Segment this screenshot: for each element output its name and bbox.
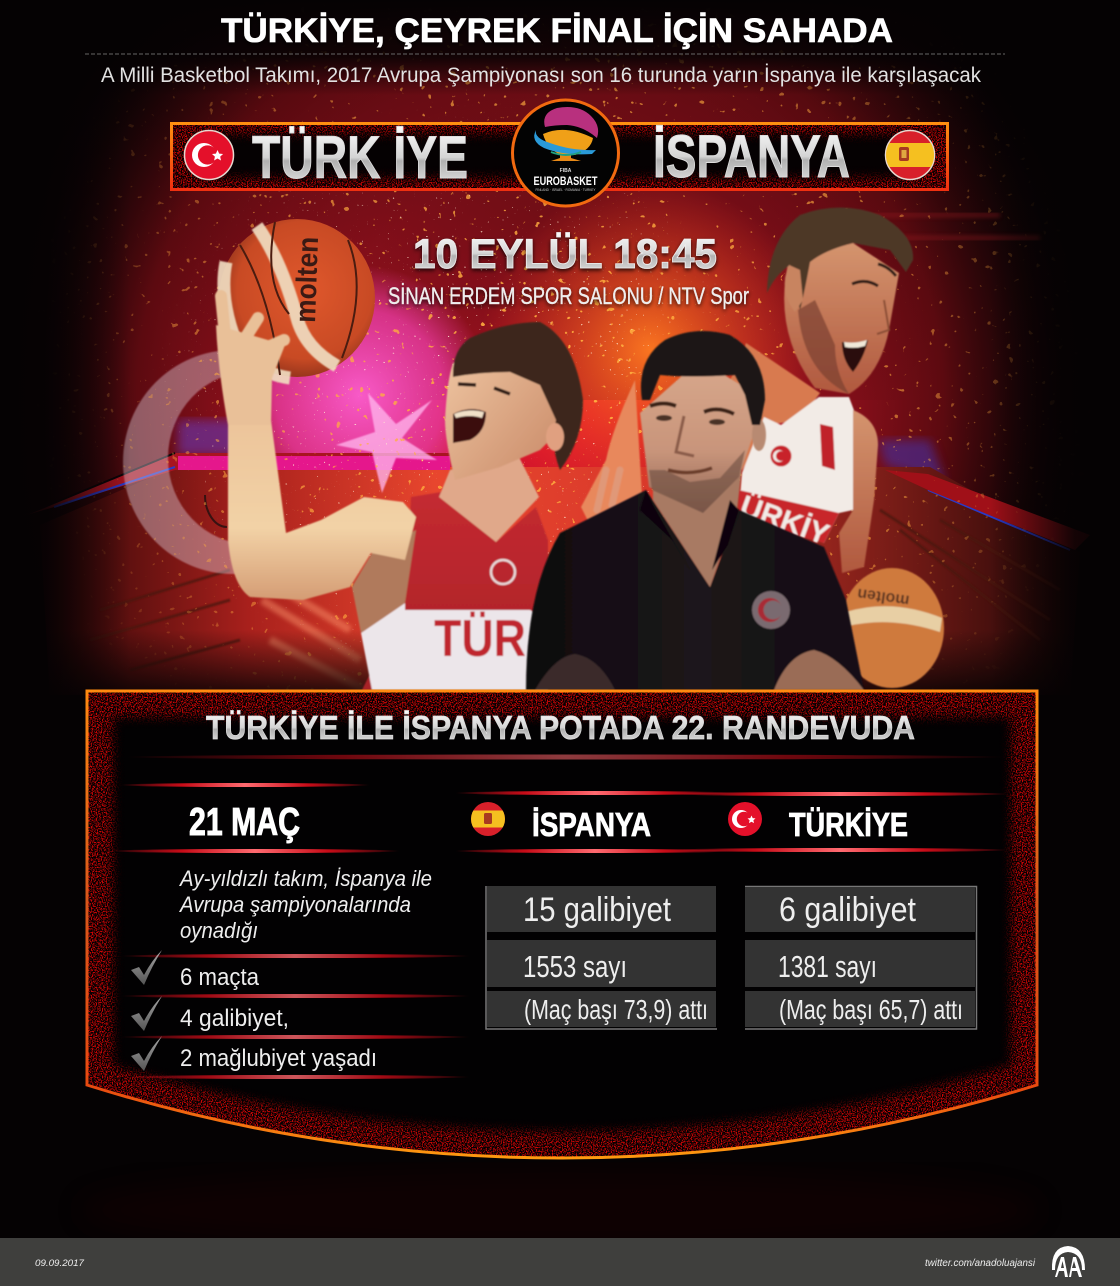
column: İspanya [470, 802, 717, 1029]
raised arm behind the coach [581, 380, 642, 525]
basketball [219, 219, 375, 378]
list: record: 2 mağlubiyet yaşadı [180, 1045, 377, 1072]
left column: match summary [131, 801, 432, 1072]
stats table: 1381 sayı [778, 949, 877, 984]
logo: EuroBasket: FIBA [560, 168, 572, 174]
stats table: (Maç başı 73,9) attı [524, 994, 708, 1025]
match banner [172, 100, 948, 206]
team name: Türkiye: TÜRK İYE [252, 124, 468, 191]
logo: Anadolu Agency [1052, 1246, 1085, 1277]
description text: oynadığı [180, 918, 258, 943]
title: TÜRKİYE, ÇEYREK FİNAL İÇİN SAHADA [221, 12, 893, 50]
column heading: İSPANYA [532, 806, 651, 843]
check icons [131, 950, 162, 1071]
date and time: 10 EYLÜL 18:45 [413, 230, 717, 277]
flag: İspanya [885, 130, 935, 180]
event details [388, 230, 749, 310]
date: 09.09.2017 [35, 1258, 85, 1269]
star backdrop [336, 393, 437, 493]
logo: EuroBasket: EUROBASKET [534, 174, 598, 188]
flag: İspanya [470, 802, 506, 836]
player: left, Türkiye [216, 296, 583, 690]
player: right, Türkiye jersey: ÜRKİY [736, 490, 833, 552]
logo: EuroBasket: FINLAND · ISRAEL · ROMANIA · TURKEY [536, 187, 596, 192]
panel: head to head [80, 685, 1045, 1165]
stats table: (Maç başı 65,7) attı [779, 994, 963, 1025]
stats table: 15 galibiyet [523, 891, 671, 929]
logo: EuroBasket [512, 100, 618, 206]
flag: Türkiye [184, 130, 234, 180]
player: right, Türkiye jersey [581, 208, 944, 688]
heading: 21 matches: 21 MAÇ [189, 801, 300, 844]
coach [526, 331, 864, 690]
venue and broadcaster: SİNAN ERDEM SPOR SALONU / NTV Spor [388, 283, 749, 310]
social handle: twitter.com/anadoluajansi [925, 1258, 1036, 1269]
crescent backdrop [122, 350, 235, 575]
subtitle: A Milli Basketbol Takımı, 2017 Avrupa Şampiyonası son 16 turunda yarın İspanya ile karşılaşacak [101, 63, 981, 87]
player: right, Türkiye jersey: molten [856, 585, 911, 609]
column heading: TÜRKİYE [789, 806, 908, 843]
flag: Türkiye [728, 802, 762, 836]
stats table [486, 886, 717, 1029]
panel heading: TÜRKİYE İLE İSPANYA POTADA 22. RANDEVUDA [206, 709, 915, 746]
stats table [745, 886, 976, 1029]
description text: Avrupa şampiyonalarında [178, 892, 411, 917]
stats table: 1553 sayı [523, 949, 627, 984]
player: left, Türkiye: TÜR [434, 610, 526, 668]
list: record [180, 964, 377, 1072]
description text [178, 866, 432, 943]
basketball: molten [290, 236, 325, 323]
column: Türkiye [728, 802, 976, 1029]
description text: Ay-yıldızlı takım, İspanya ile [178, 866, 432, 891]
stats table: 6 galibiyet [779, 891, 916, 929]
footer [0, 1238, 1120, 1286]
list: record: 6 maçta [180, 964, 260, 991]
list: record: 4 galibiyet, [180, 1005, 289, 1032]
team name: İspanya: İSPANYA [653, 123, 850, 190]
